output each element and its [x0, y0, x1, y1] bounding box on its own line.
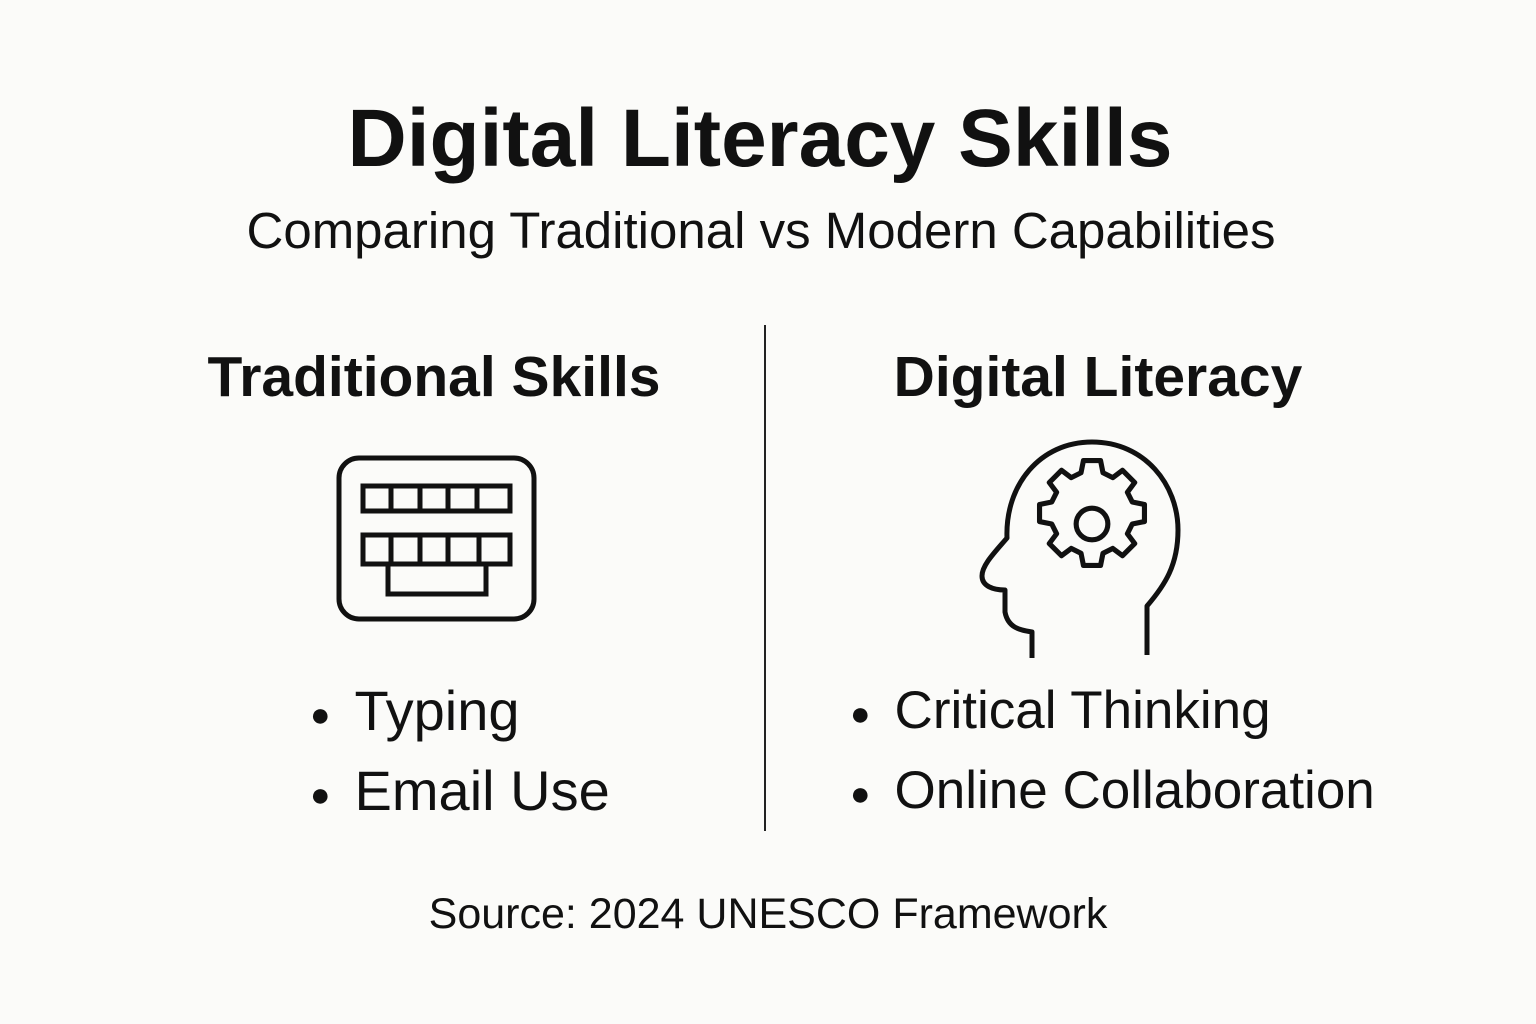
icon: head with gear: [980, 440, 1180, 658]
title: Digital Literacy Skills: [348, 93, 1172, 184]
divider: [764, 325, 766, 831]
heading: digital literacy: Digital Literacy: [894, 345, 1302, 409]
bullet list: traditional: ● Typing: [310, 679, 520, 742]
panel: digital literacy: [850, 345, 1375, 820]
icon: keyboard: [336, 456, 536, 622]
source note: Source: 2024 UNESCO Framework: [429, 890, 1107, 938]
panel: traditional skills: [208, 345, 660, 822]
heading: traditional: Traditional Skills: [208, 345, 660, 409]
subtitle: Comparing Traditional vs Modern Capabilities: [246, 202, 1276, 259]
bullet list: digital: [850, 681, 1375, 820]
bullet list: digital: ● Online Collaboration: [850, 761, 1375, 820]
bullet list: traditional: [310, 679, 610, 822]
bullet list: traditional: ● Email Use: [310, 759, 610, 822]
bullet list: digital: ● Critical Thinking: [850, 681, 1271, 740]
